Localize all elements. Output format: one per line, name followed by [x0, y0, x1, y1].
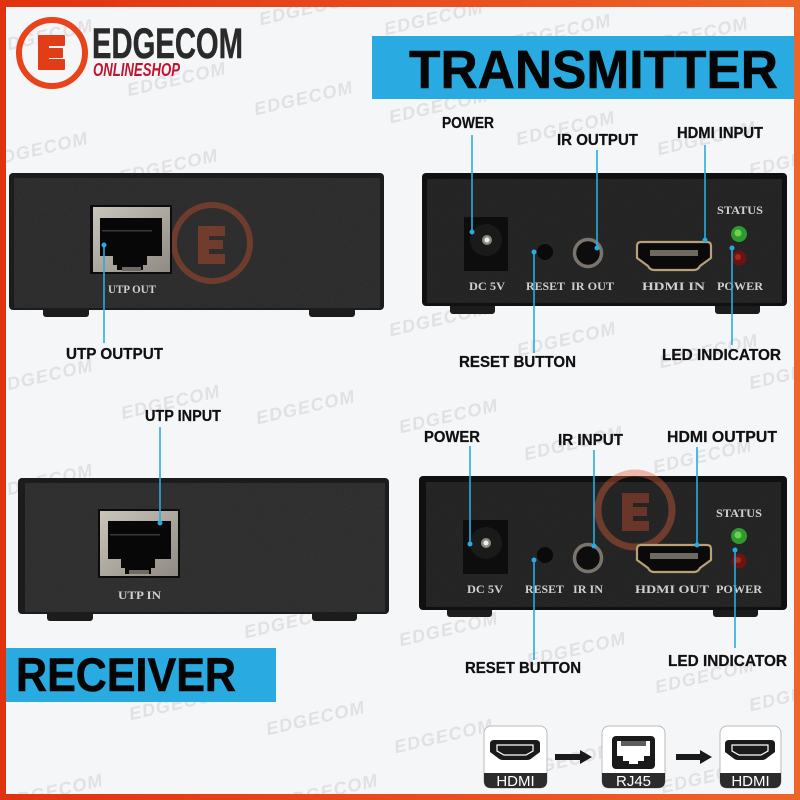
callout labels: UTP INPUT: [145, 408, 221, 425]
HDMI port: [637, 545, 711, 572]
UTP port: [98, 509, 180, 578]
watermarks: EDGECOM: [659, 755, 762, 797]
panel labels: [469, 203, 763, 293]
watermarks: EDGECOM: [387, 85, 490, 127]
device: transmitter UTP side: [9, 173, 384, 317]
watermarks: EDGECOM: [252, 77, 355, 119]
signal flow diagram: [484, 726, 781, 790]
panel labels: DC 5V: [467, 582, 503, 596]
icon: HDMI display: [720, 726, 781, 790]
IR jack: [574, 544, 602, 572]
callout lines: [102, 135, 738, 660]
callout labels: HDMI INPUT: [677, 125, 763, 142]
banner: transmitter: TRANSMITTER: [409, 40, 778, 100]
panel labels: POWER: [716, 582, 762, 596]
device: transmitter UTP side: UTP OUT: [108, 282, 156, 296]
callout labels: LED INDICATOR: [662, 347, 781, 364]
watermarks: EDGECOM: [657, 330, 760, 372]
callout labels: RESET BUTTON: [459, 354, 576, 371]
callout labels: RESET BUTTON: [465, 660, 581, 677]
LEDs: [731, 528, 747, 568]
DC jack: [464, 217, 508, 271]
logo: EDGECOM: [92, 20, 243, 68]
panel labels: RESET: [525, 582, 564, 596]
watermarks: EDGECOM: [512, 740, 615, 782]
watermarks: EDGECOM: [125, 58, 228, 100]
callout labels: LED INDICATOR: [668, 653, 787, 670]
watermarks: EDGECOM: [387, 298, 490, 340]
device: transmitter front: [422, 173, 787, 314]
panel labels: IR OUT: [571, 279, 614, 293]
panel labels: STATUS: [717, 203, 763, 217]
panel labels: POWER: [717, 279, 763, 293]
watermarks: EDGECOM: [653, 655, 756, 697]
panel labels: HDMI IN: [642, 279, 705, 293]
panel labels: IR IN: [573, 582, 603, 596]
watermark seal: [174, 205, 250, 281]
device: receiver front: [419, 473, 787, 617]
watermarks: EDGECOM: [117, 145, 220, 187]
reset button: [537, 547, 553, 563]
icon: RJ45: RJ45: [616, 773, 651, 790]
logo: [19, 20, 243, 86]
HDMI port: [637, 242, 711, 270]
LEDs: [731, 226, 747, 266]
DC jack: [463, 520, 508, 574]
watermarks: EDGECOM: [254, 386, 357, 428]
watermarks: EDGECOM: [525, 628, 628, 670]
logo: ONLINESHOP: [93, 60, 181, 80]
watermarks: EDGECOM: [242, 600, 345, 642]
watermarks: EDGECOM: [397, 395, 500, 437]
panel labels: RESET: [526, 279, 565, 293]
device: receiver UTP side: [18, 478, 389, 621]
icon: HDMI display: HDMI: [731, 773, 770, 790]
callout labels: IR INPUT: [558, 432, 624, 449]
watermarks: EDGECOM: [655, 117, 758, 159]
watermarks: EDGECOM: [522, 422, 625, 464]
arrow: [555, 750, 592, 764]
icon: HDMI source: HDMI: [496, 773, 535, 790]
callout labels: POWER: [442, 115, 494, 132]
panel labels: [467, 506, 762, 596]
watermarks: EDGECOM: [392, 715, 495, 757]
callout labels: POWER: [424, 429, 480, 446]
callout labels: [66, 115, 787, 677]
watermarks: EDGECOM: [127, 682, 230, 724]
panel labels: HDMI OUT: [635, 582, 709, 596]
panel labels: DC 5V: [469, 279, 505, 293]
icon: RJ45: [602, 726, 665, 790]
arrow: [676, 750, 712, 764]
watermarks: EDGECOM: [510, 10, 613, 52]
watermark seal: [598, 473, 672, 547]
callout labels: IR OUTPUT: [557, 132, 639, 149]
IR jack: [574, 240, 602, 266]
watermarks: EDGECOM: [119, 381, 222, 423]
callout labels: UTP OUTPUT: [66, 346, 164, 363]
panel labels: STATUS: [716, 506, 762, 520]
device: receiver UTP side: UTP IN: [118, 588, 161, 602]
UTP port: [90, 205, 172, 274]
watermarks: EDGECOM: [515, 318, 618, 360]
watermarks: EDGECOM: [514, 107, 617, 149]
callout labels: HDMI OUTPUT: [667, 429, 778, 446]
watermarks: EDGECOM: [397, 608, 500, 650]
watermarks: EDGECOM: [651, 435, 754, 477]
banner: receiver: RECEIVER: [16, 648, 236, 701]
reset button: [537, 244, 553, 260]
watermarks: EDGECOM: [647, 13, 750, 55]
icon: HDMI source: [484, 726, 547, 790]
watermarks: EDGECOM: [264, 697, 367, 739]
